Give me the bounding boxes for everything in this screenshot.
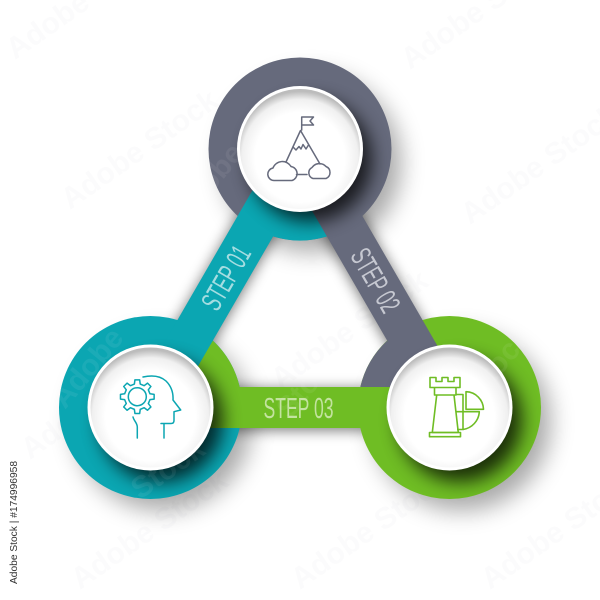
teal band <box>133 139 318 418</box>
label: STEP 03: STEP 03 <box>264 393 334 425</box>
outer drop shadows <box>74 74 550 510</box>
watermark on artwork: Adobe <box>45 322 130 414</box>
grey ring <box>208 58 392 240</box>
watermark on background: Adobe Stock <box>15 333 184 466</box>
right white disc <box>386 344 512 470</box>
watermark on artwork: Adobe <box>165 137 250 229</box>
watermark on background: Adobe Stock <box>55 83 224 216</box>
grey band <box>282 139 467 418</box>
label: STEP 01: STEP 01 <box>196 240 258 316</box>
teal ring <box>59 316 242 499</box>
watermark on background: Adobe Stock <box>65 463 234 596</box>
watermark on artwork <box>45 137 538 506</box>
grey tail on green ring <box>360 341 430 387</box>
vertical stock credit: Adobe Stock | #174996958 <box>8 461 20 584</box>
left white disc <box>88 344 214 470</box>
teal tail on grey ring <box>273 159 327 241</box>
watermark on artwork: Stock <box>270 340 348 424</box>
icon: mountain with flag and clouds <box>268 117 330 180</box>
top white disc <box>237 86 363 212</box>
green tail on teal ring <box>168 341 240 387</box>
label: STEP 02: STEP 02 <box>344 243 406 319</box>
diagram: ring and band structure <box>59 58 541 499</box>
green ring <box>358 316 541 499</box>
icon: chess rook with pie shield <box>430 378 484 437</box>
watermark on artwork: Stock <box>460 320 538 404</box>
icon: head with gear <box>120 376 181 438</box>
green band <box>150 387 450 428</box>
watermark on background: Adobe Stock <box>285 463 454 596</box>
watermark on artwork: Stock <box>125 432 211 506</box>
shadows cast on the rings by the white discs <box>99 98 522 482</box>
watermark on background: Adobe Stock <box>265 263 434 396</box>
